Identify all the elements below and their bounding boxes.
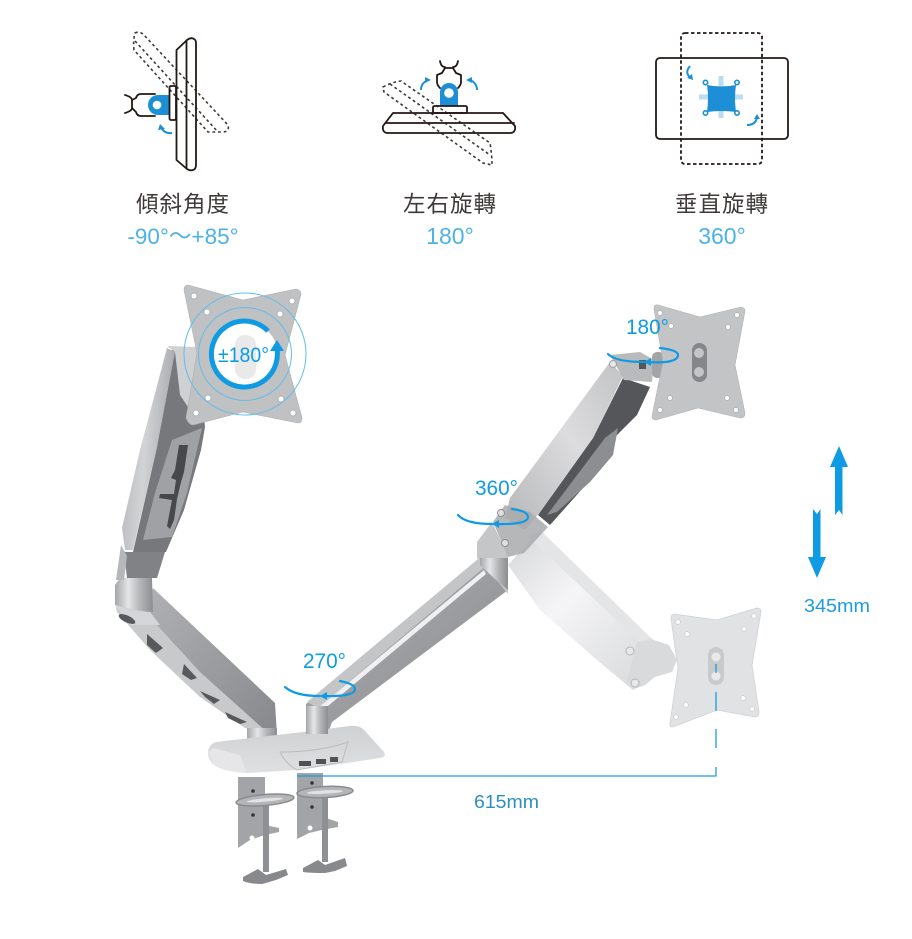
label: 270: 270° [303,649,346,673]
ghost arm: lowered position [508,530,761,727]
icon: left-right swivel [383,61,515,165]
dimension line: 615mm [297,664,716,776]
arm: left lower [115,578,277,744]
heading: rotation: 垂直旋轉 [675,192,769,217]
label: 345mm: 345mm [804,596,870,616]
rotation ring arrow [211,321,284,387]
clamp: left [236,777,294,884]
label: 360: 360° [475,476,518,500]
dial label: ±180° [218,343,269,367]
mounting plate: left with rotation dial [184,285,306,425]
rotation arrow: 360 [458,509,528,528]
rotation arrow: 270 [285,681,355,700]
ghost mounting plate [670,608,761,727]
value: rotation range: 360° [698,223,746,249]
arm: right upper [493,352,664,557]
icon: tilt angle [125,32,228,170]
mounting plate: right upper [652,305,745,420]
rotation arrow: 180 [608,348,678,366]
label: 615mm: 615mm [474,792,539,812]
clamp: right [297,773,353,873]
arrow: height up [830,446,848,515]
arm: left upper [116,346,205,580]
arrow: height down [808,509,826,578]
arm: right lower [306,522,508,734]
icon: rotation [656,33,788,164]
value: tilt range: -90°～+85° [127,224,239,249]
value: swivel range: 180° [426,223,474,249]
heading: tilt: 傾斜角度 [136,192,230,217]
desk base with USB ports [208,706,385,773]
label: 180: 180° [626,315,669,339]
heading: swivel: 左右旋轉 [403,192,497,217]
